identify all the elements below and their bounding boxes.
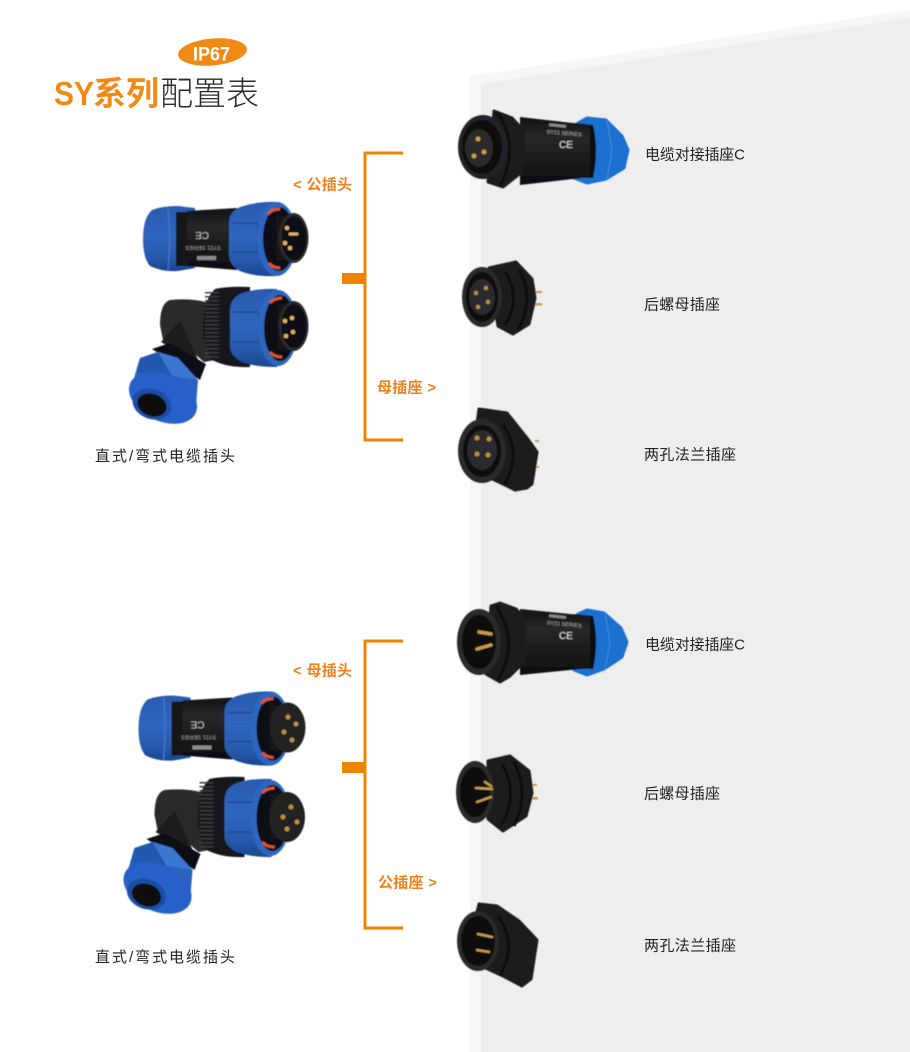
icon: straight female cable plug bbox=[138, 691, 306, 766]
icon: angled male cable plug bbox=[121, 287, 308, 434]
title: SY系列配置表: 系列 bbox=[93, 75, 159, 112]
caption: top plugs: 直式/弯式电缆插头 bbox=[95, 448, 235, 465]
title: SY系列配置表 bbox=[54, 75, 259, 112]
icon: male cable socket C: CE bbox=[559, 631, 573, 642]
bracket stem: bottom group bbox=[342, 762, 365, 773]
icon: angled female cable plug bbox=[115, 777, 305, 924]
bracket: bottom group bbox=[365, 641, 403, 928]
label: 母插头: < 母插头 bbox=[293, 662, 352, 680]
icon: straight male cable plug: SY21 SERIES bbox=[185, 244, 221, 250]
label: 母插座: 母插座 > bbox=[377, 378, 436, 396]
icon: straight male cable plug: CE bbox=[195, 229, 209, 240]
icon: female rear-nut socket bbox=[462, 262, 542, 334]
badge: IP67 bbox=[177, 36, 248, 68]
label: 后螺母插座 (bottom): 后螺母插座 bbox=[644, 786, 720, 802]
caption: bottom plugs: 直式/弯式电缆插头 bbox=[95, 949, 235, 966]
label: 两孔法兰插座 (bottom): 两孔法兰插座 bbox=[644, 938, 736, 954]
icon: male two-hole flange socket bbox=[457, 904, 538, 986]
icon: straight female cable plug: SY21 SERIES bbox=[181, 734, 216, 740]
bracket stem: top group bbox=[342, 273, 365, 284]
label: 后螺母插座: 后螺母插座 bbox=[644, 296, 720, 314]
bracket: top group bbox=[365, 153, 403, 440]
icon: male rear-nut socket bbox=[456, 756, 538, 831]
icon: male cable socket C bbox=[457, 603, 627, 682]
icon: female cable socket C bbox=[458, 111, 628, 187]
icon: female cable socket C: CE bbox=[559, 140, 573, 151]
icon: male cable socket C: SY21 SERIES bbox=[546, 620, 582, 630]
label: 电缆对接插座C: 电缆对接插座C bbox=[645, 146, 745, 164]
label: 公插座: 公插座 > bbox=[378, 874, 437, 892]
badge: IP67: IP67 bbox=[193, 44, 230, 66]
title: SY系列配置表: 配置表 bbox=[160, 75, 259, 112]
label: 电缆对接插座C (bottom): 电缆对接插座C bbox=[645, 636, 745, 654]
icon: female two-hole flange socket bbox=[458, 409, 539, 490]
icon: straight male cable plug bbox=[143, 202, 308, 276]
icon: female cable socket C: SY21 SERIES bbox=[546, 129, 582, 139]
icon: straight female cable plug: CE bbox=[190, 718, 204, 730]
title: SY系列配置表: SY bbox=[54, 75, 94, 112]
label: 公插头: < 公插头 bbox=[293, 176, 352, 194]
label: 两孔法兰插座: 两孔法兰插座 bbox=[644, 446, 736, 464]
background panel: grey angled panel bbox=[470, 10, 910, 1052]
